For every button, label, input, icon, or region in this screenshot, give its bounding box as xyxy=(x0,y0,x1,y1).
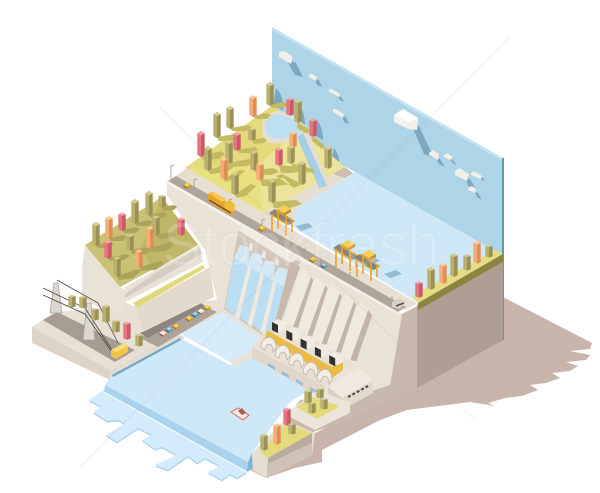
switchyard with pylons xyxy=(43,280,143,359)
river outer jagged water xyxy=(89,390,247,482)
chute 2 xyxy=(238,252,263,324)
dark dam side block xyxy=(250,255,503,478)
wall beside spillway xyxy=(272,262,300,335)
watermark crossing lines xyxy=(80,37,510,467)
chute 4 xyxy=(263,267,288,339)
hill tree shadows xyxy=(201,102,325,208)
lake back wall xyxy=(272,27,504,340)
watermark text: Stockfresh xyxy=(163,211,440,278)
tree shadows on the wall xyxy=(273,88,339,162)
small maintenance machine xyxy=(392,298,405,309)
dam front face xyxy=(167,182,402,400)
bridge over spillway xyxy=(238,227,300,267)
yellow generator strip xyxy=(265,330,343,378)
ice blocks on wall xyxy=(279,51,485,200)
shadows on left hill xyxy=(96,205,177,280)
powerhouse block xyxy=(328,367,373,410)
buttresses xyxy=(283,270,372,361)
spillway apron xyxy=(180,312,270,367)
ground shadow xyxy=(266,297,592,478)
pond and stream xyxy=(262,111,330,191)
outlet notches xyxy=(268,363,317,394)
road cars xyxy=(183,183,328,268)
river below the dam xyxy=(104,338,313,472)
parked cars xyxy=(159,305,211,337)
lamp posts xyxy=(171,165,392,306)
piers between chutes xyxy=(235,238,280,335)
outlet arches xyxy=(261,337,332,384)
chute 1 xyxy=(225,245,250,317)
bottom terraces with trees xyxy=(252,388,350,478)
chute 3 xyxy=(250,260,275,332)
tanker truck xyxy=(208,192,235,215)
transformer caps and boxes xyxy=(272,319,343,366)
yellow transformer box xyxy=(111,343,128,359)
dam road deck xyxy=(167,165,417,316)
left hill terraces xyxy=(82,191,214,332)
trees, right hill xyxy=(197,82,332,203)
right bank trees xyxy=(412,241,503,310)
boat xyxy=(231,408,249,420)
spillway xyxy=(224,227,300,339)
powerhouse xyxy=(252,319,343,400)
gantry cranes xyxy=(269,205,380,281)
trees, left hill xyxy=(92,191,185,277)
lake surface xyxy=(290,172,503,302)
crane shadows on lake xyxy=(296,223,402,278)
right hill with forest xyxy=(185,82,353,222)
parking and pylon platform xyxy=(32,300,227,380)
